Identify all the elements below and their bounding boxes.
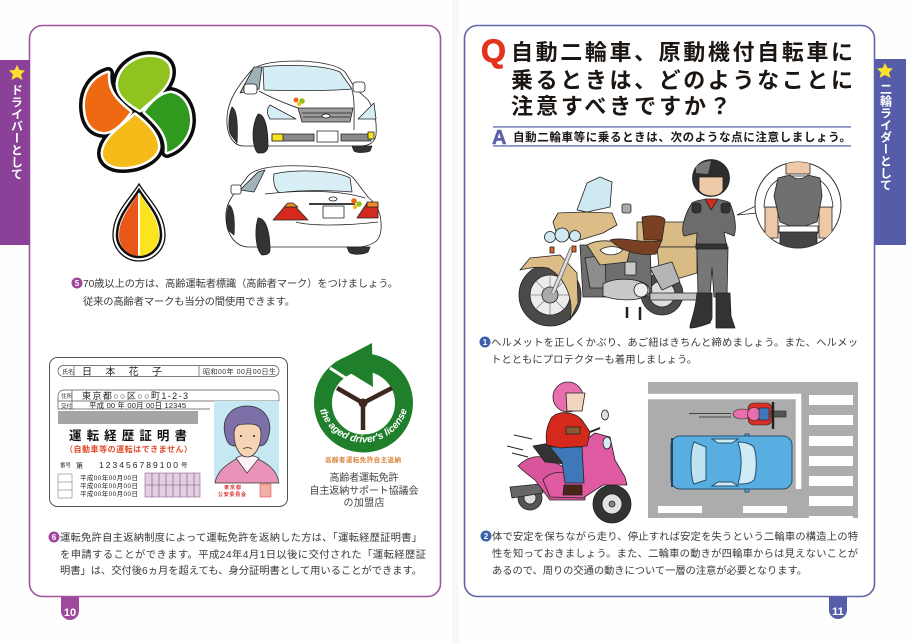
text: note 6: を申請することができます。平成24年4月1日以後に交付された「運転経歴証 xyxy=(60,548,426,561)
icon: aged driver's license logo: 高齢者運転免許 xyxy=(330,471,398,484)
illustration: driving history certificate card: 日本花子 xyxy=(82,365,162,378)
text: note 2: 性を知っておきましょう。また、二輪車の動きが四輪車からは見えないことが xyxy=(492,547,859,560)
icon: aged driver's license logo: の加盟店 xyxy=(344,497,384,509)
illustration: road blind spot diagram xyxy=(648,382,858,518)
heading: question: Q xyxy=(481,33,506,69)
illustration: driving history certificate card: 運転経歴証明書 xyxy=(69,428,187,443)
icon: blue car top view xyxy=(671,434,792,492)
heading: question: 自動二輪車、原動機付自転車に xyxy=(511,40,853,65)
icon: old senior driver drop mark xyxy=(113,184,165,261)
text: note 2 xyxy=(480,530,859,577)
heading: question: 乗るときは、どのようなことに xyxy=(511,68,853,93)
text: note 6: 運転免許自主返納制度によって運転免許を返納した方は、「運転経歴証明書」 xyxy=(60,531,422,544)
text: note 1: 1 xyxy=(483,338,488,347)
illustration: touring motorcycle xyxy=(519,177,697,326)
text: note 2: あるので、周りの交通の動きについて一層の注意が必要となります。 xyxy=(492,564,807,577)
text: note 1: ヘルメットを正しくかぶり、あご紐はきちんと締めましょう。また、ヘルメッ xyxy=(491,336,858,349)
callout: back protector xyxy=(737,160,841,248)
illustration: driving history certificate card: 番号 xyxy=(60,462,72,469)
panel: right page frame xyxy=(464,26,874,596)
heading: answer: 自動二輪車等に乗るときは、次のような点に注意しましょう。 xyxy=(513,130,851,144)
heading: question xyxy=(481,33,853,119)
illustration: driving history certificate card: 第 xyxy=(76,461,83,470)
text: note 2: 2 xyxy=(484,532,489,541)
illustration: driving history certificate card: 交付 xyxy=(61,402,73,410)
illustration: driving history certificate card: 平成00年00月00日 xyxy=(80,473,138,482)
text: note 5: 5 xyxy=(75,279,80,288)
side tab: rider xyxy=(875,59,906,245)
illustration: driving history certificate card: 平成 00 年 00月 00日 12345 xyxy=(89,400,186,410)
text: note 6: 明書」は、交付後6ヵ月を超えても、身分証明書として用いることができます。 xyxy=(60,564,422,577)
icon: motorcycle top view xyxy=(689,402,786,429)
text: note 1 xyxy=(480,336,858,366)
text: note 5: 70歳以上の方は、高齢運転者標識（高齢者マーク）をつけましょう。 xyxy=(83,277,398,290)
illustration: driving history certificate card: 住所 xyxy=(61,392,73,400)
illustration: driving history certificate card: 平成00年00月00日 xyxy=(80,489,138,498)
icon: aged driver's license logo xyxy=(310,343,418,509)
text: note 5: 従来の高齢者マークも当分の間使用できます。 xyxy=(83,295,295,308)
icon: senior driver clover mark xyxy=(85,57,190,167)
illustration: driving history certificate card: 東京都 xyxy=(224,484,241,491)
text: note 5 xyxy=(72,277,398,308)
icon: aged driver's license logo: 高齢者運転免許自主返納 xyxy=(325,455,402,464)
illustration: driving history certificate card: 東京都○○区○○町1-2-3 xyxy=(82,390,188,401)
text: note 1: トとともにプロテクターも着用しましょう。 xyxy=(491,353,697,366)
illustration: driving history certificate card: 昭和00年 00月00日生 xyxy=(203,367,276,376)
illustration: pink scooter rider xyxy=(507,382,631,523)
illustration: driving history certificate card: （自動車等の運転はできません） xyxy=(65,444,192,454)
side tab: driver xyxy=(0,60,30,245)
illustration: driving history certificate card: 公安委員会 xyxy=(218,491,246,498)
illustration: driving history certificate card: 123456789100 xyxy=(99,460,178,470)
heading: question: 注意すべきですか？ xyxy=(511,94,731,119)
panel: left page frame xyxy=(30,26,440,596)
illustration: white car rear view xyxy=(226,166,381,255)
page number 10 xyxy=(61,597,79,620)
illustration: driving history certificate card: 氏名 xyxy=(62,368,74,376)
side tab: driver: ドライバーとして xyxy=(8,84,26,180)
illustration: driving history certificate card xyxy=(50,358,288,506)
text: note 6 xyxy=(48,531,426,577)
side tab: rider: 二輪ライダーとして xyxy=(878,83,894,191)
page number 11: 11 xyxy=(832,606,844,618)
heading: answer: A xyxy=(492,127,506,149)
icon: aged driver's license logo: the aged driver's license xyxy=(320,408,406,442)
illustration: rider adjusting helmet xyxy=(683,160,735,328)
illustration: driving history certificate card: 平成00年00月00日 xyxy=(80,481,138,490)
page number 10: 10 xyxy=(64,607,76,619)
illustration: white car front view xyxy=(227,61,376,153)
icon: aged driver's license logo: 自主返納サポート協議会 xyxy=(310,484,418,497)
illustration: driving history certificate card: 号 xyxy=(181,461,188,469)
heading: answer xyxy=(492,126,851,149)
text: note 2: 体で安定を保ちながら走り、停止すれば安定を失うという二輪車の構造上の特 xyxy=(492,530,858,543)
page number 11 xyxy=(829,597,847,619)
text: note 6: 6 xyxy=(52,533,57,542)
